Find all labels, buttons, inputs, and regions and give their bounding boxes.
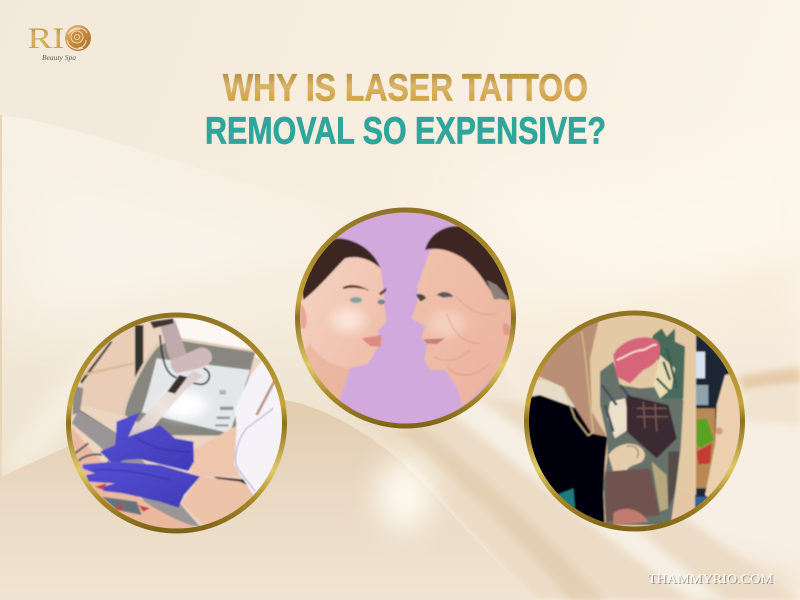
photo circle: laser treatment [66, 312, 287, 534]
watermark: website: THAMMYRIO.COM [649, 572, 774, 587]
treatment room wall [78, 326, 135, 414]
gold ring [526, 313, 742, 529]
title [205, 68, 606, 152]
purple gloves [83, 412, 200, 508]
icon: gold rose [65, 25, 91, 51]
photo circle: tattooed arm [524, 310, 745, 532]
gold ring [298, 210, 514, 426]
photo circle: young and older woman [295, 208, 516, 428]
gold ring [68, 315, 284, 531]
laser machine monitor: 50 [219, 390, 227, 396]
right background shop [694, 334, 740, 508]
neck skin [539, 322, 607, 438]
laser handpiece [107, 371, 203, 464]
older woman [412, 225, 511, 406]
laser machine monitor [121, 337, 257, 437]
tattooed upper arm [602, 334, 698, 523]
title line 2: REMOVAL SO EXPENSIVE? [205, 110, 606, 152]
arm tattoo [600, 328, 685, 526]
tattooed forearm [70, 385, 195, 538]
necklace [563, 332, 593, 436]
logo: RIO Beauty Spa [28, 22, 91, 62]
logo tagline: Beauty Spa [42, 53, 76, 62]
young woman [300, 238, 388, 400]
title line 1: WHY IS LASER TATTOO [223, 68, 588, 110]
dark clothing [529, 394, 608, 522]
white coat [234, 360, 282, 496]
grey cloth [72, 410, 200, 527]
watermark: website: THAMMYRIO.COM [648, 571, 773, 586]
laser arm [150, 318, 212, 384]
nurse arms [182, 426, 254, 525]
logo wordmark: RI [28, 22, 64, 55]
